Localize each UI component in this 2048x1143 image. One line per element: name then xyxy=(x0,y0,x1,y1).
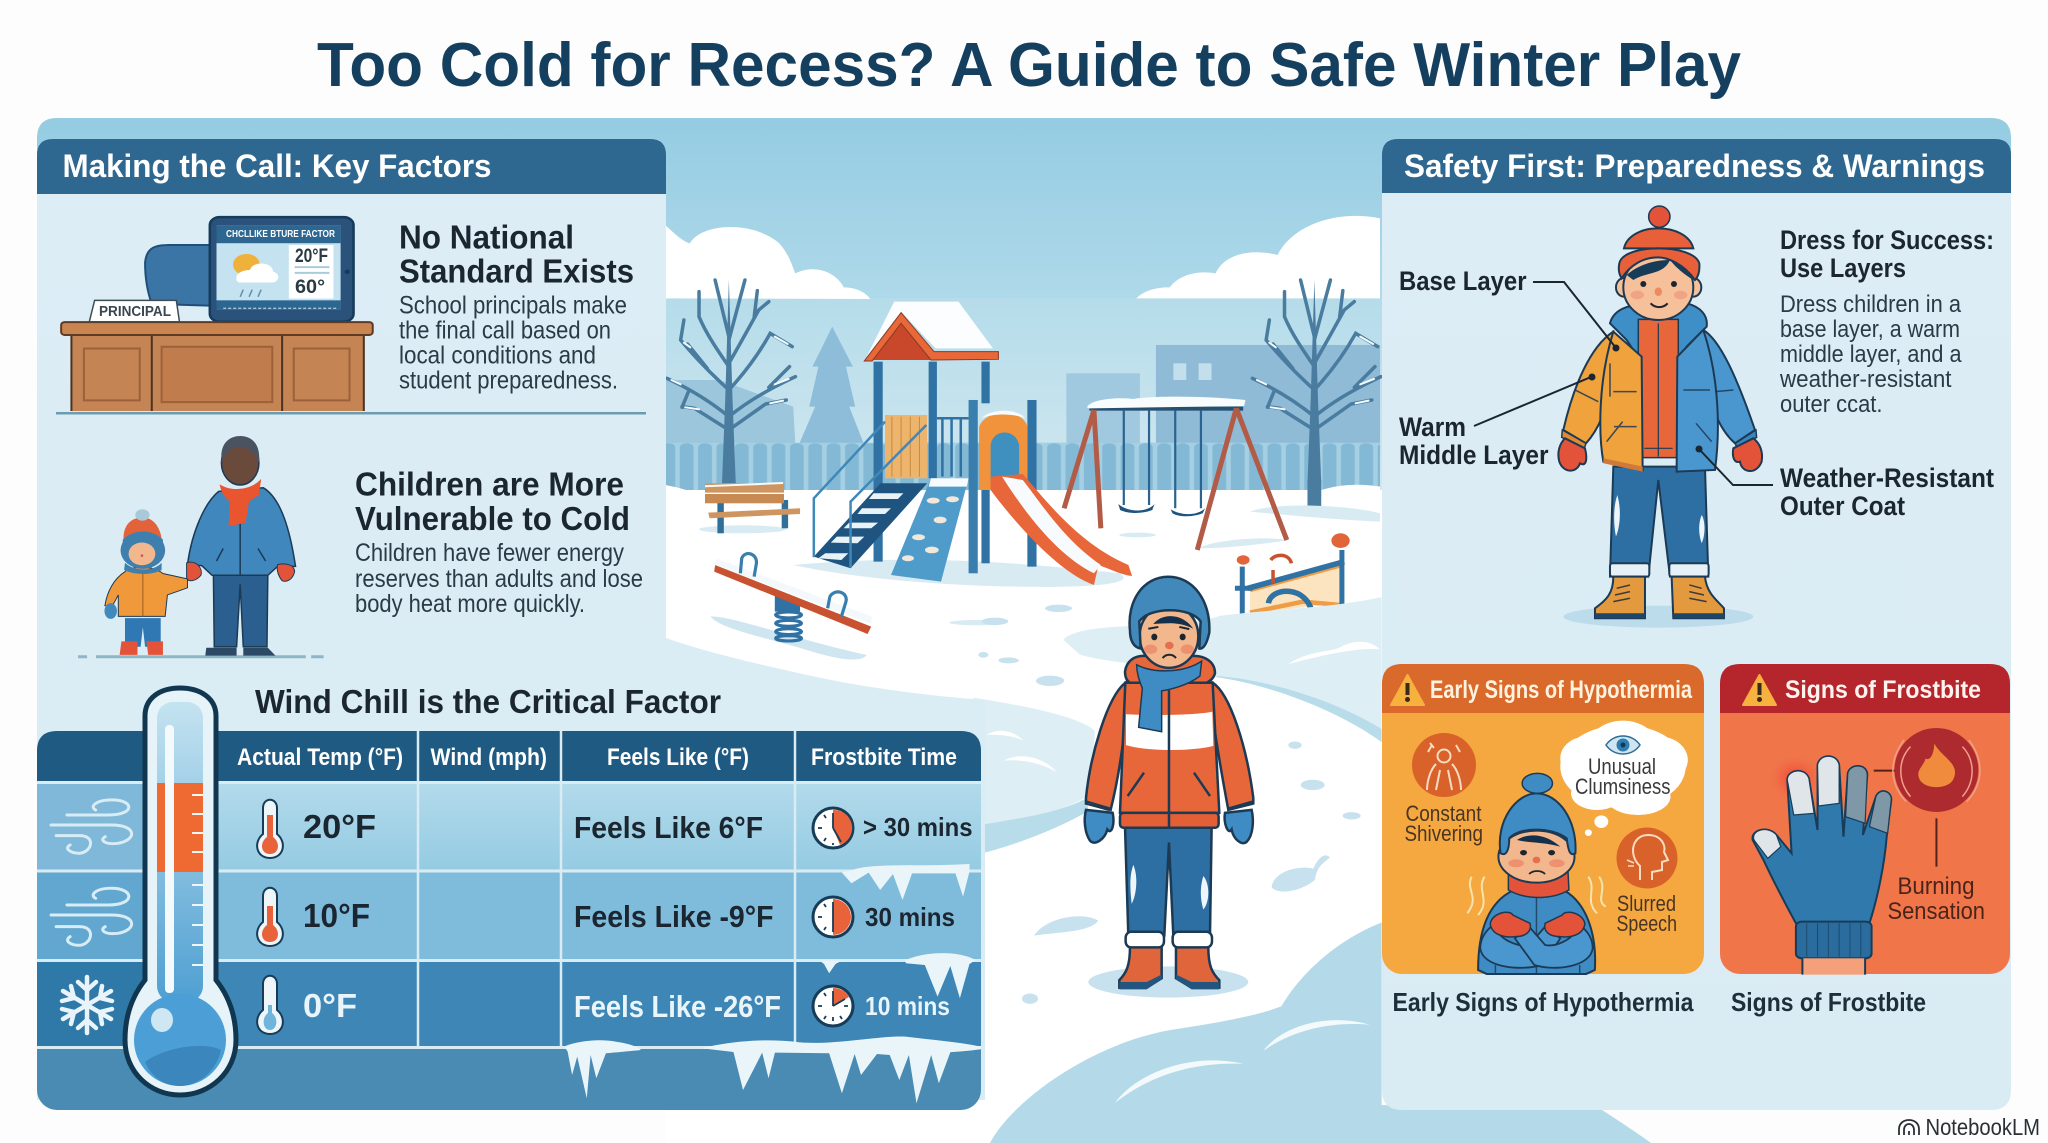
sad child in the snow xyxy=(1085,577,1253,998)
row 3 temperature: 0°F xyxy=(303,987,357,1024)
column header: actual temp: Actual Temp (°F) xyxy=(237,744,403,771)
label: unusual clumsiness xyxy=(1575,754,1670,799)
text block: no national standard xyxy=(399,218,634,394)
callout label: outer coat: Outer Coat xyxy=(1780,491,1905,521)
row 3 frostbite time: 10 mins xyxy=(865,991,950,1021)
icon: burning sensation xyxy=(1874,728,1980,867)
caption: signs of frostbite: Signs of Frostbite xyxy=(1731,987,1926,1017)
play structure xyxy=(814,302,1132,585)
bare trees xyxy=(667,280,1381,515)
panel background xyxy=(37,170,985,1100)
text block: children more vulnerable: Vulnerable to Cold xyxy=(355,500,630,537)
row 3 feels like: Feels Like -26°F xyxy=(574,989,781,1024)
picket fence xyxy=(666,443,1380,496)
card: early signs of hypothermia xyxy=(1382,664,1704,974)
panel background xyxy=(1382,170,2011,1110)
row 1 feels like: Feels Like 6°F xyxy=(574,810,763,845)
bench xyxy=(705,482,800,533)
snowy ground xyxy=(666,485,1382,1143)
text block: dress for success: outer ccat. xyxy=(1780,391,1882,418)
big foreground snow mound xyxy=(990,923,1651,1143)
wind chill heading: Wind Chill is the Critical Factor xyxy=(255,683,721,720)
text block: dress for success: base layer, a warm xyxy=(1780,316,1960,343)
text block: children more vulnerable: Children have fewer energy xyxy=(355,539,624,567)
card header bar xyxy=(1382,664,1704,713)
clouds xyxy=(660,216,1380,299)
card heading: Signs of Frostbite xyxy=(1785,676,1981,704)
text block: no national standard: Standard Exists xyxy=(399,252,634,290)
icon: wind row two xyxy=(51,888,132,945)
row 1 frostbite time: > 30 mins xyxy=(863,812,972,842)
text block: no national standard: local conditions and xyxy=(399,342,596,370)
callout label: outer coat: Weather-Resistant xyxy=(1780,463,1994,493)
callout label: warm middle layer: Middle Layer xyxy=(1399,440,1549,470)
panel header xyxy=(1382,139,2011,193)
icon: shivering xyxy=(1412,733,1476,797)
callout label: warm middle layer: Warm xyxy=(1399,412,1466,442)
label: slurred speech: Slurred xyxy=(1617,891,1676,916)
desk nameplate text: PRINCIPAL xyxy=(99,303,171,320)
mini thermometer 0F xyxy=(257,976,283,1034)
label: slurred speech xyxy=(1616,891,1677,936)
panel heading: Safety First: Preparedness & Warnings xyxy=(1404,148,1985,184)
wind chill table xyxy=(37,688,981,1110)
label: constant shivering: Constant xyxy=(1406,801,1482,826)
text block: no national standard: School principals make xyxy=(399,292,627,320)
text block: dress for success: Use Layers xyxy=(1780,253,1906,283)
ground shadows xyxy=(699,505,1380,684)
text block: dress for success: weather-resistant xyxy=(1779,366,1952,393)
tablet heading text: CHCLLIKE BTURE FACTOR xyxy=(226,228,335,240)
icon: warning triangle xyxy=(1743,675,1776,705)
snow drifts xyxy=(973,597,1382,1004)
label: burning sensation: Burning xyxy=(1898,873,1974,900)
icon: eye xyxy=(1606,736,1640,754)
text block: dress for success xyxy=(1779,225,1994,418)
child in layered winter clothes xyxy=(1558,206,1762,628)
scene: winter playground xyxy=(660,216,1651,1143)
label: burning sensation: Sensation xyxy=(1888,898,1985,925)
card: signs of frostbite xyxy=(1720,664,2010,975)
table body xyxy=(37,731,981,1110)
thought cloud xyxy=(1560,721,1688,836)
row 2 temperature: 10°F xyxy=(303,897,370,934)
callout line: outer coat xyxy=(1696,446,1773,485)
shivering child with crossed arms xyxy=(1467,773,1606,974)
text block: dress for success: Dress children in a xyxy=(1780,291,1962,318)
caption: early signs of hypothermia: Early Signs of Hypothermia xyxy=(1392,987,1694,1017)
scene: sky backdrop xyxy=(37,118,2011,500)
seesaw xyxy=(714,554,872,641)
text block: children more vulnerable: body heat more quickly. xyxy=(355,590,585,618)
label: unusual clumsiness: Clumsiness xyxy=(1575,774,1670,799)
callout line: base layer xyxy=(1533,282,1620,352)
row 2 frostbite time: 30 mins xyxy=(865,902,955,932)
panel: making the call xyxy=(37,139,985,1110)
callout line: warm middle layer xyxy=(1474,374,1596,426)
mini thermometer 20F xyxy=(257,800,283,858)
column header: feels like: Feels Like (°F) xyxy=(607,744,749,771)
callout label: outer coat xyxy=(1780,463,1994,521)
column header: wind: Wind (mph) xyxy=(430,744,547,771)
frostbitten glove illustration xyxy=(1752,752,1891,975)
row 2 feels like: Feels Like -9°F xyxy=(574,899,774,934)
text block: children more vulnerable: Children are More xyxy=(355,466,624,502)
label: constant shivering: Shivering xyxy=(1404,821,1483,846)
row 1 temperature: 20°F xyxy=(303,808,376,845)
card background xyxy=(1720,664,2010,974)
adult and child illustration xyxy=(78,436,324,657)
text block: no national standard: the final call based on xyxy=(399,316,611,344)
text block: children more vulnerable: reserves than adults and lose xyxy=(355,565,643,593)
card background xyxy=(1382,664,1704,974)
principal desk illustration xyxy=(61,217,373,411)
label: burning sensation xyxy=(1888,873,1985,925)
icon: snowflake xyxy=(62,977,112,1033)
text block: dress for success: middle layer, and a xyxy=(1780,341,1962,368)
text block: children more vulnerable xyxy=(355,466,643,618)
spring rider xyxy=(1235,533,1350,623)
divider xyxy=(56,412,646,414)
mini thermometer 10F xyxy=(257,888,283,946)
column header: frostbite time: Frostbite Time xyxy=(811,744,957,771)
icon: warning triangle xyxy=(1391,675,1424,705)
icon: wind row one xyxy=(51,800,132,853)
text block: no national standard: student preparedness. xyxy=(399,366,618,394)
label: constant shivering xyxy=(1404,801,1483,846)
clock: 10 mins xyxy=(813,986,853,1026)
card header bar xyxy=(1720,664,2010,713)
label: slurred speech: Speech xyxy=(1616,911,1677,936)
clock: 30 mins xyxy=(813,897,853,937)
tablet reading two: 60° xyxy=(295,277,325,298)
icicles xyxy=(564,864,981,1103)
card heading: Early Signs of Hypothermia xyxy=(1430,676,1693,704)
callout label: warm middle layer xyxy=(1399,412,1549,470)
swing set xyxy=(1064,397,1287,550)
text block: no national standard: No National xyxy=(399,218,574,256)
callout label: base layer: Base Layer xyxy=(1399,266,1527,296)
text block: dress for success: Dress for Success: xyxy=(1780,225,1994,255)
thermometer graphic xyxy=(125,688,236,1095)
tablet reading one: 20°F xyxy=(295,246,328,267)
label: unusual clumsiness: Unusual xyxy=(1588,754,1656,779)
icon: slurred speech xyxy=(1616,828,1678,888)
clock: over 30 mins xyxy=(813,808,853,848)
panel header xyxy=(37,139,666,194)
title: Too Cold for Recess? A Guide to Safe Winter Play xyxy=(317,31,1741,100)
panel heading: Making the Call: Key Factors xyxy=(62,148,492,184)
background buildings and pine xyxy=(666,327,1380,448)
panel: safety first xyxy=(1382,139,2011,1110)
background haze band xyxy=(666,298,1382,498)
